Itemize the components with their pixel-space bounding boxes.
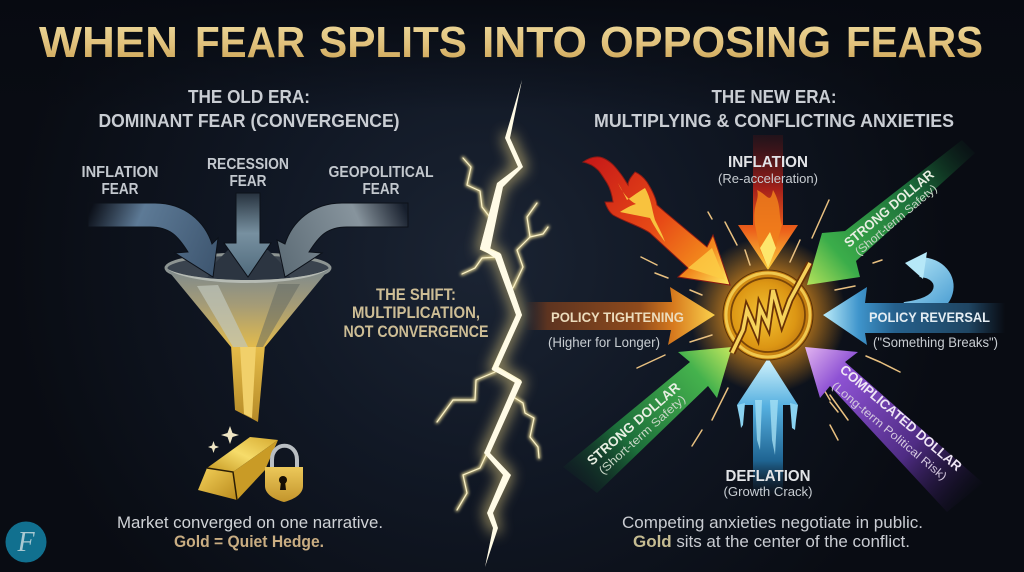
- icon: sparkles: [208, 426, 239, 453]
- label: strong dollar top: STRONG DOLLAR: [841, 167, 937, 250]
- caption: old era: Gold = Quiet Hedge.: [174, 532, 324, 551]
- label: inflation fear: INFLATION: [82, 164, 158, 181]
- panel: old era: [6, 86, 434, 562]
- heading: old era: [98, 86, 400, 131]
- callout: the shift: NOT CONVERGENCE: [344, 323, 488, 341]
- title: OPPOSING: [600, 18, 831, 67]
- title: INTO: [482, 18, 587, 67]
- lightning divider: [437, 80, 548, 567]
- callout: the shift: [344, 286, 488, 341]
- label: complicated dollar: (Long-term Political Risk): [829, 380, 949, 483]
- heading: new era: MULTIPLYING & CONFLICTING ANXIETIES: [594, 110, 954, 131]
- label: deflation growth crack: [724, 468, 812, 499]
- title: [39, 18, 983, 67]
- arrow: complicated dollar: [805, 347, 983, 512]
- callout: the shift: THE SHIFT:: [376, 286, 456, 304]
- label: complicated dollar: COMPLICATED DOLLAR: [837, 362, 965, 474]
- caption: old era: Market converged on one narrative.: [117, 513, 383, 532]
- label: inflation fear: [82, 164, 158, 198]
- arrow: policy reversal: [823, 287, 1005, 345]
- title: FEAR: [195, 18, 305, 67]
- arrow: inflation fear: [88, 203, 218, 277]
- icon: gold bar with padlock: [198, 426, 303, 502]
- heading: old era: DOMINANT FEAR (CONVERGENCE): [98, 110, 400, 131]
- label: inflation re-acceleration: [718, 154, 818, 186]
- label: inflation re-acceleration: (Re-acceleration): [718, 171, 818, 186]
- arrow: policy reversal curl: [905, 252, 944, 312]
- icon: gold coin: [723, 263, 813, 360]
- caption: old era: [117, 513, 383, 551]
- label: recession fear: [207, 156, 289, 190]
- arrow: strong dollar short-term safety bottom: [563, 347, 732, 493]
- label: recession fear: FEAR: [230, 173, 266, 190]
- arrow: inflation re-acceleration: [738, 135, 798, 270]
- callout: the shift: MULTIPLICATION,: [352, 304, 480, 322]
- label: geopolitical fear: GEOPOLITICAL: [328, 164, 434, 181]
- funnel: [166, 250, 330, 422]
- title: FEARS: [846, 18, 983, 67]
- title: WHEN: [39, 18, 178, 67]
- label: policy tightening: POLICY TIGHTENING: [551, 309, 684, 325]
- caption: new era: Gold sits at the center of the conflict.: [633, 532, 910, 551]
- label: inflation fear: FEAR: [102, 181, 138, 198]
- arrow: deflation ice: [737, 358, 798, 495]
- heading: new era: THE NEW ERA:: [712, 86, 836, 107]
- caption: new era: [622, 513, 923, 551]
- title: SPLITS: [319, 18, 467, 67]
- label: geopolitical fear: FEAR: [362, 181, 400, 198]
- heading: old era: THE OLD ERA:: [188, 86, 310, 107]
- label: strong dollar bottom: (Short-term Safety): [597, 393, 688, 477]
- label: inflation re-acceleration: INFLATION: [728, 154, 808, 171]
- label: strong dollar bottom: STRONG DOLLAR: [584, 379, 683, 468]
- arrow: strong dollar short-term safety top: [807, 140, 975, 285]
- label: geopolitical fear: [328, 164, 434, 198]
- icon: logo badge: F: [16, 527, 35, 558]
- sublabel: higher for longer: (Higher for Longer): [548, 335, 660, 350]
- label: deflation growth crack: DEFLATION: [726, 468, 810, 485]
- sparks and burst behind coin: [637, 200, 900, 446]
- arrow: policy tightening: [525, 287, 715, 345]
- arrow: geopolitical fear: [277, 203, 408, 277]
- panel: new era: [525, 86, 1005, 551]
- label: recession fear: RECESSION: [207, 156, 289, 173]
- sublabel: something breaks: ("Something Breaks"): [873, 335, 998, 350]
- arrow: flame inflation: [583, 157, 730, 285]
- heading: new era: [594, 86, 954, 131]
- label: policy reversal: POLICY REVERSAL: [869, 309, 990, 325]
- label: deflation growth crack: (Growth Crack): [724, 484, 812, 499]
- label: strong dollar top: (Short-term Safety): [853, 183, 940, 258]
- icon: logo badge: [6, 522, 46, 562]
- caption: new era: Competing anxieties negotiate in public.: [622, 513, 923, 532]
- arrow: recession fear: [224, 193, 271, 277]
